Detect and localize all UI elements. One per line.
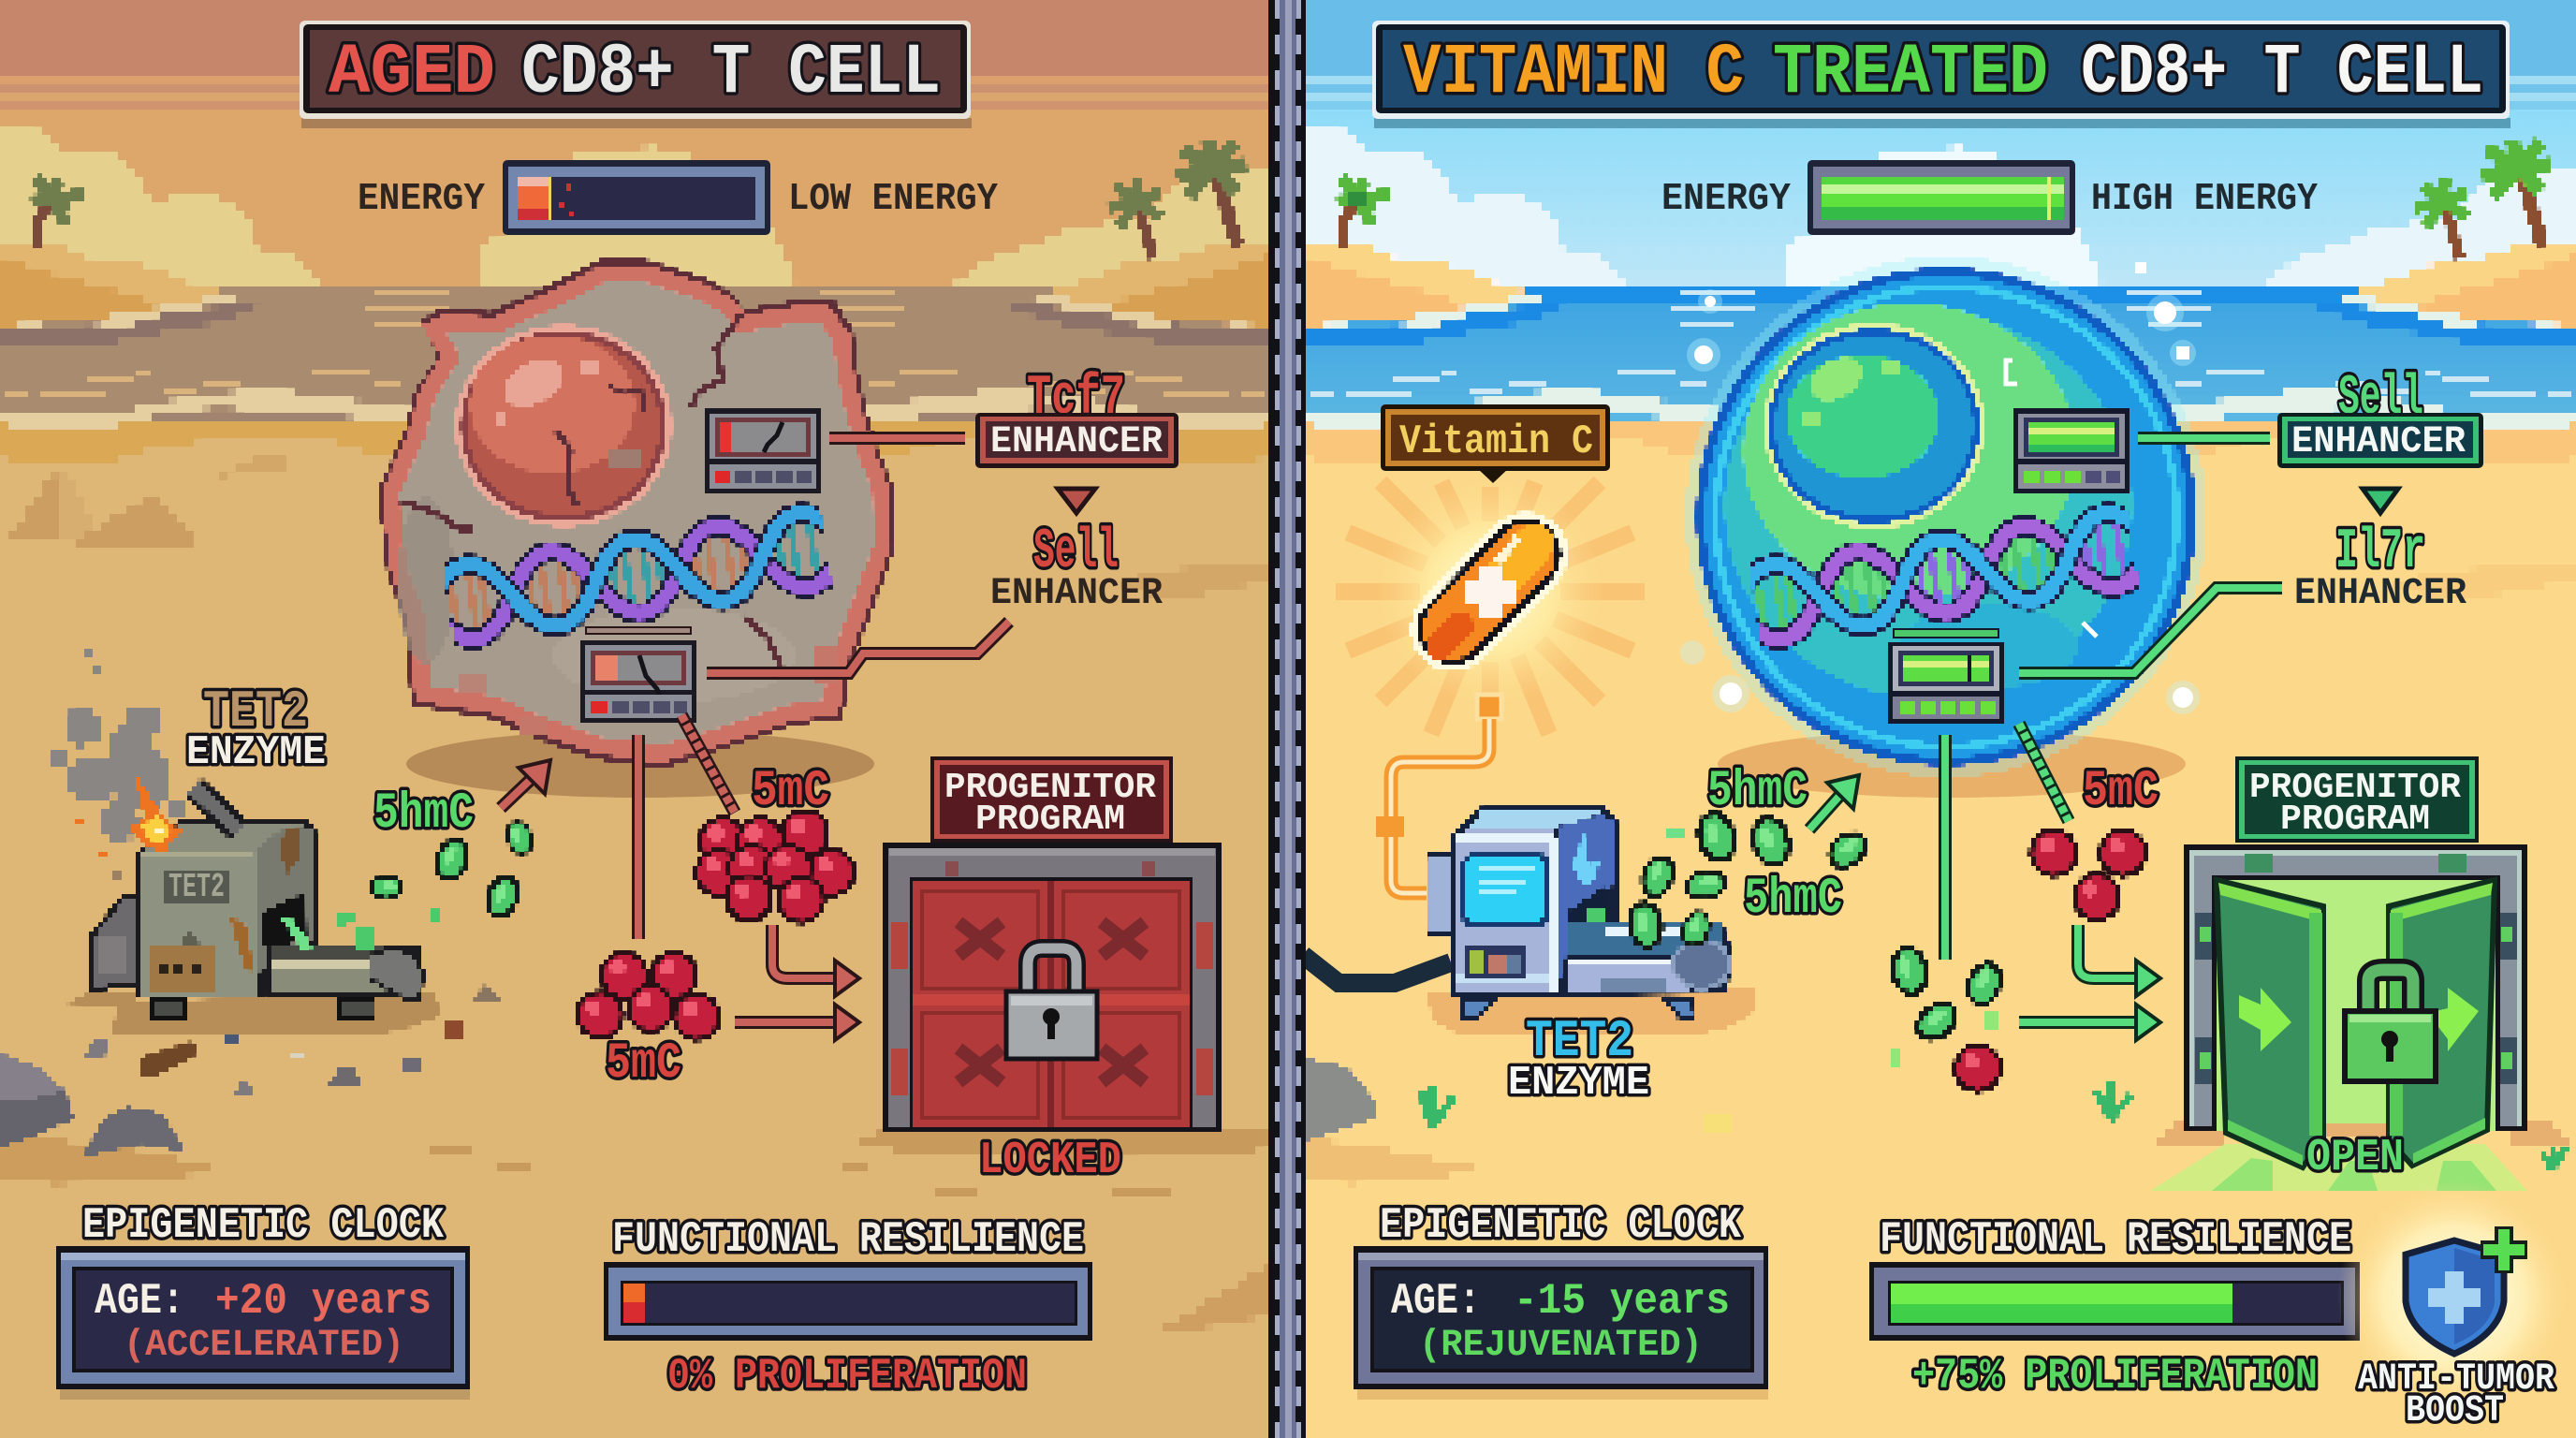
5hmC label: 5hmC <box>373 785 474 843</box>
TET2 enzyme label <box>186 682 326 776</box>
epigenetic clock: treated <box>1354 1201 1768 1400</box>
TET2 enzyme label <box>1508 1011 1649 1107</box>
Sell enhancer label: Sell <box>1033 521 1119 584</box>
Tcf7 enhancer tag: ENHANCER <box>990 421 1163 463</box>
progenitor program sign: PROGRAM <box>2280 800 2430 840</box>
progenitor program sign: PROGRAM <box>975 800 1125 840</box>
debris and rocks <box>0 985 504 1157</box>
Vitamin C callout <box>1381 404 1610 483</box>
functional resilience: aged: FUNCTIONAL RESILIENCE <box>612 1215 1084 1264</box>
arrow: Tcf7 to Sell <box>1058 489 1095 513</box>
TET2 enzyme label: TET2 <box>203 682 308 741</box>
upper 5hmC label: 5hmC <box>1707 763 1808 820</box>
energy meter: ENERGY <box>358 178 485 221</box>
title banner: AGED <box>329 33 495 113</box>
rock and grass <box>1304 1058 2567 1168</box>
nucleus <box>455 325 672 527</box>
connector: switch to Tcf7 enhancer <box>829 432 965 445</box>
palm trees <box>31 140 1247 258</box>
light rays <box>1336 482 1645 734</box>
connector: switch to Sell enhancer <box>707 622 1009 673</box>
machine body <box>1427 807 1756 1035</box>
cable <box>1303 955 1451 983</box>
energy meter: HIGH ENERGY <box>2091 178 2318 221</box>
TET2 enzyme label: TET2 <box>1526 1011 1633 1071</box>
energy meter <box>358 160 998 235</box>
epigenetic clock: aged: +20 years <box>215 1277 432 1326</box>
title banner: CD8+ T CELL <box>2081 33 2483 113</box>
vitamin C pill with rays <box>1336 475 1645 734</box>
scarce 5hmC pebbles <box>341 814 544 923</box>
elbow arrow to open door <box>2078 925 2160 996</box>
upper active gene switch <box>2013 408 2130 493</box>
anti-tumor boost shield <box>2337 1180 2571 1432</box>
upper methylation cluster <box>696 811 854 922</box>
progenitor program sign: PROGENITOR <box>2249 768 2461 808</box>
Sell enhancer tag: ENHANCER <box>2291 421 2466 463</box>
progenitor program sign <box>932 758 1171 841</box>
5mC label: 5mC <box>2083 763 2159 820</box>
locked door <box>883 843 1222 1132</box>
elbow arrow to locked door <box>772 925 859 996</box>
Sell enhancer label <box>990 521 1163 615</box>
Sell enhancer label: ENHANCER <box>990 573 1163 615</box>
epigenetic clock: aged: EPIGENETIC CLOCK <box>82 1201 444 1250</box>
damaged cell <box>383 264 890 798</box>
connector: switch to pebbles <box>1939 735 1952 960</box>
smoke <box>51 651 182 842</box>
lower damaged gene switch <box>580 627 696 723</box>
left door leaf <box>2217 880 2323 1167</box>
Tcf7 enhancer tag: Tcf7 <box>1027 367 1125 431</box>
panel: aged CD8+ T cell <box>0 0 1292 1438</box>
title banner: TREATED <box>1773 33 2048 113</box>
abundant 5hmC pebbles <box>1588 800 1877 958</box>
progenitor program sign: PROGENITOR <box>944 768 1156 808</box>
right door leaf <box>2389 880 2495 1166</box>
title banner: VITAMIN C <box>1403 33 1744 113</box>
energy meter: LOW ENERGY <box>788 178 998 221</box>
connector: switch to lower 5mC cluster <box>632 735 645 939</box>
padlock <box>1006 948 1097 1059</box>
epigenetic clock: treated: (REJUVENATED) <box>1419 1325 1703 1367</box>
Il7r enhancer label: Il7r <box>2335 521 2425 584</box>
connector: switch to 5mC <box>2019 724 2069 821</box>
orange tube from pill to machine <box>1376 695 1501 893</box>
arrow: Sell to Il7r <box>2363 489 2398 513</box>
functional resilience: treated <box>1869 1215 2360 1401</box>
title banner: CD8+ T CELL <box>521 33 941 113</box>
TET2 enzyme label: ENZYME <box>1508 1060 1649 1107</box>
Il7r enhancer label <box>2294 521 2466 615</box>
sparse 5mC balls <box>1955 830 2145 1091</box>
Vitamin C callout: Vitamin C <box>1399 418 1593 465</box>
functional resilience: treated: +75% PROLIFERATION <box>1912 1352 2318 1401</box>
title banner <box>1372 21 2510 128</box>
machine body <box>66 786 440 1034</box>
lower 5mC label: 5mC <box>606 1035 681 1093</box>
epigenetic clock: aged <box>56 1201 470 1400</box>
lower 5hmC label: 5hmC <box>1744 871 1842 928</box>
healthy cell <box>1680 257 2206 798</box>
connector: switch to Il7r enhancer <box>2019 588 2282 673</box>
progenitor program sign <box>2237 758 2477 841</box>
flame <box>73 772 183 880</box>
epigenetic clock: treated: -15 years <box>1514 1277 1730 1326</box>
locked status: LOCKED <box>979 1136 1121 1186</box>
DNA helix <box>423 506 851 645</box>
energy meter <box>1661 160 2318 235</box>
anti-tumor boost shield: BOOST <box>2406 1390 2504 1432</box>
Sell enhancer tag <box>2277 367 2483 468</box>
anti-tumor boost shield: ANTI-TUMOR <box>2358 1358 2554 1401</box>
converted green pebbles <box>1877 936 2005 1069</box>
Sell enhancer tag: Sell <box>2338 367 2423 431</box>
arrow: 5hmC toward cell <box>501 760 550 808</box>
cell body <box>383 264 890 764</box>
energy meter: ENERGY <box>1661 178 1791 221</box>
arrow to locked door <box>735 1005 859 1040</box>
functional resilience: aged <box>604 1215 1092 1401</box>
Tcf7 enhancer tag <box>975 367 1178 468</box>
broken TET2 machine <box>51 651 440 1034</box>
open door <box>2150 844 2527 1191</box>
Il7r enhancer label: ENHANCER <box>2294 573 2466 615</box>
arrow: 5hmC toward cell <box>1809 775 1859 829</box>
desert background <box>0 0 1292 1438</box>
beach background <box>1303 0 2576 1438</box>
functional resilience: aged: 0% PROLIFERATION <box>667 1352 1027 1401</box>
lower active gene switch <box>1888 629 2004 724</box>
cell body <box>1686 257 2206 777</box>
epigenetic clock: treated: EPIGENETIC CLOCK <box>1380 1201 1741 1250</box>
panel: vitamin C treated CD8+ T cell <box>1303 0 2576 1438</box>
title banner <box>300 21 972 128</box>
sparkles <box>1680 262 2200 714</box>
lower methylation cluster <box>578 953 719 1039</box>
epigenetic clock: aged: AGE: <box>95 1277 184 1326</box>
epigenetic clock: aged: (ACCELERATED) <box>124 1325 404 1367</box>
TET2 enzyme label: ENZYME <box>186 729 326 776</box>
machine nameplate text: TET2 <box>168 868 225 906</box>
arrow to open door <box>2019 1005 2160 1040</box>
DNA helix <box>1730 506 2158 645</box>
palm trees <box>1337 140 2552 258</box>
center divider <box>1268 0 1306 1438</box>
nucleus <box>1764 323 1984 529</box>
epigenetic clock: treated: AGE: <box>1391 1277 1481 1326</box>
upper damaged gene switch <box>705 408 821 493</box>
open padlock <box>2345 970 2436 1081</box>
upper 5mC label: 5mC <box>752 763 829 820</box>
connector: switch to upper 5mC cluster <box>681 715 735 813</box>
capsule <box>1439 537 1535 646</box>
connector: switch to Sell enhancer <box>2138 432 2270 445</box>
open status: OPEN <box>2306 1133 2404 1183</box>
functional resilience: treated: FUNCTIONAL RESILIENCE <box>1880 1215 2351 1264</box>
working TET2 machine <box>1303 807 1756 1035</box>
